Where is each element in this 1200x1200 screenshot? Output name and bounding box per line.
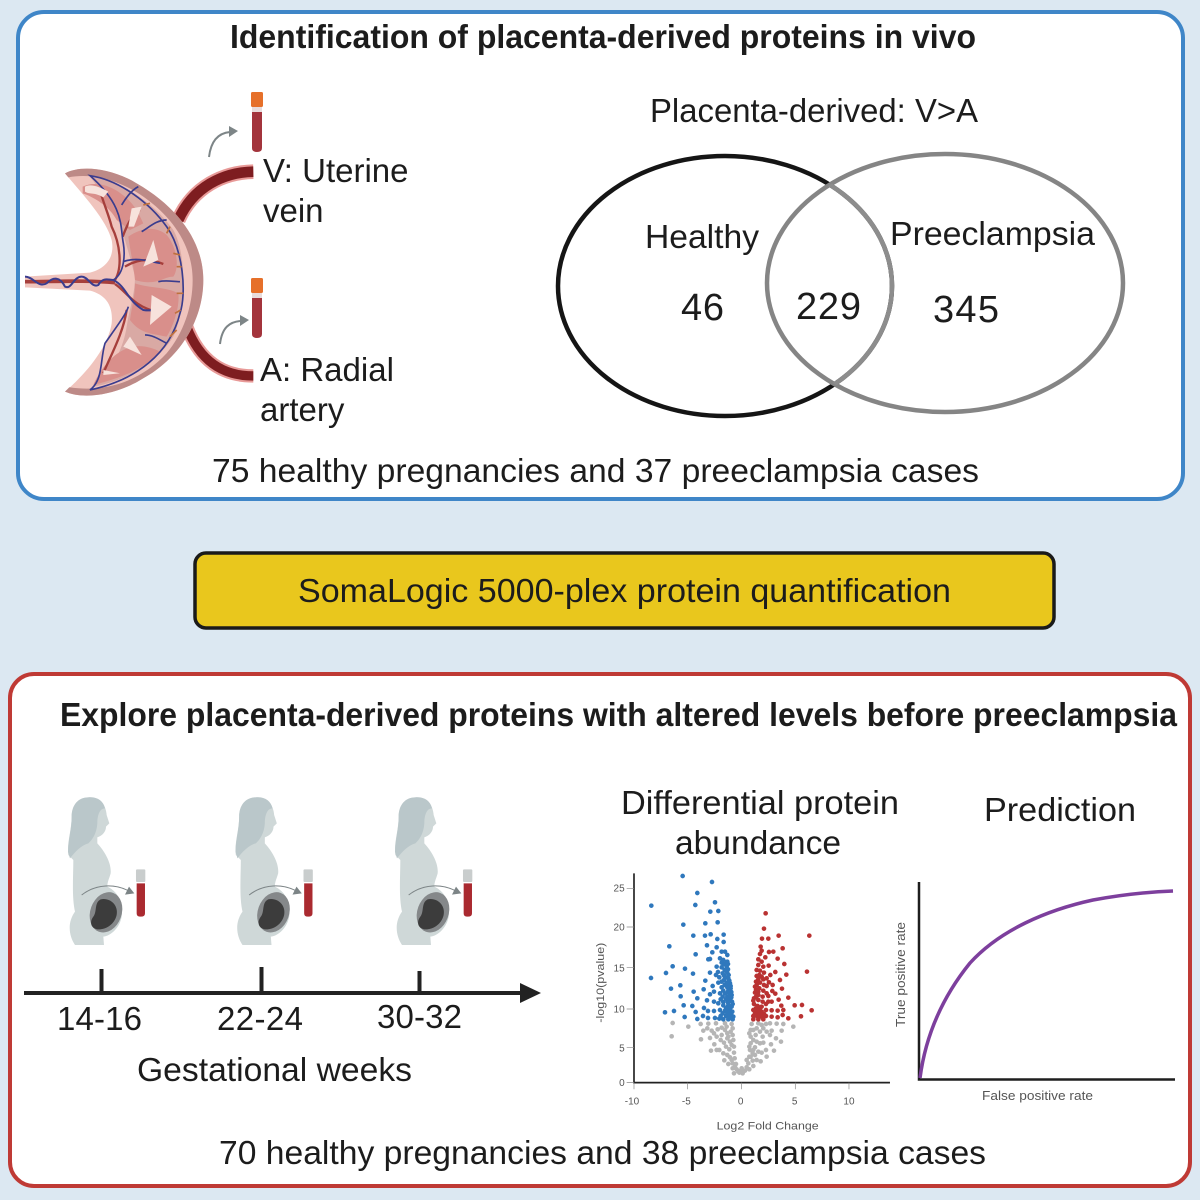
banner: SomaLogic: SomaLogic 5000-plex protein quantification (298, 572, 951, 609)
banner: SomaLogic (195, 553, 1054, 628)
axis tick labels: 5 (619, 1043, 625, 1054)
illustration: placenta with vessels (25, 169, 253, 396)
panel: in vivo identification (18, 12, 1183, 499)
label: Preeclampsia: Preeclampsia (890, 215, 1096, 252)
chart: volcano plot: -5 (682, 1096, 691, 1107)
axis title: log2 fold change: Log2 Fold Change (717, 1120, 819, 1132)
icon: blood tube, radial artery (251, 278, 263, 338)
chart: volcano plot: 10 (843, 1096, 855, 1107)
chart: volcano plot: 0 (738, 1096, 744, 1107)
axis tick labels: 25 (614, 884, 625, 895)
icon: pregnant woman 14-16 (68, 797, 145, 945)
label: A radial artery: artery (260, 391, 345, 428)
label: 30-32: 30-32 (377, 998, 462, 1035)
number: preeclampsia only: 345 (933, 289, 999, 331)
text: cohort bottom: 70 healthy pregnancies and 38 preeclampsia cases (219, 1134, 986, 1171)
label: 14-16: 14-16 (57, 1000, 142, 1037)
icon: blood tube, uterine vein (251, 92, 263, 152)
axis tick labels: 20 (614, 922, 625, 933)
label: V uterine vein: vein (263, 192, 324, 229)
label: V uterine vein: V: Uterine (263, 152, 409, 189)
axis tick labels: 0 (619, 1078, 625, 1089)
chart: Venn diagram (558, 154, 1123, 416)
axis title: -log10 pvalue: -log10(pvalue) (595, 942, 607, 1023)
chart: volcano plot: 5 (792, 1096, 798, 1107)
chart: volcano plot: -10 (625, 1096, 640, 1107)
number: shared: 229 (796, 286, 861, 328)
panel: longitudinal exploration (10, 674, 1190, 1186)
icon: pregnant woman 30-32 (395, 797, 472, 945)
label: A radial artery: A: Radial (260, 351, 394, 388)
label: 22-24: 22-24 (217, 1000, 303, 1037)
label: Healthy: Healthy (645, 218, 760, 255)
label: gestational weeks: Gestational weeks (137, 1051, 412, 1088)
number: healthy only: 46 (681, 287, 724, 329)
axis tick labels: 10 (614, 1004, 625, 1015)
axis tick labels: 15 (614, 963, 625, 974)
heading: identification: Identification of placenta-derived proteins in vivo (230, 18, 976, 55)
icon: pregnant woman 22-24 (235, 797, 313, 945)
chart: volcano plot (595, 873, 890, 1132)
axis title: true positive rate: True positive rate (893, 922, 908, 1027)
timeline arrow (24, 967, 541, 1003)
heading: differential abundance: abundance (675, 824, 841, 861)
heading: explore: Explore placenta-derived proteins with altered levels before preeclampsia (60, 696, 1178, 733)
heading: prediction: Prediction (984, 791, 1136, 828)
arrow: to vein tube (209, 126, 238, 157)
axis tick labels (614, 884, 625, 1089)
heading: Venn title: Placenta-derived: V>A (650, 92, 978, 129)
chart: ROC curve (893, 882, 1175, 1103)
axis title: false positive rate: False positive rate (982, 1088, 1093, 1103)
heading: differential abundance: Differential protein (621, 784, 899, 821)
text: cohort top: 75 healthy pregnancies and 37 preeclampsia cases (212, 452, 979, 489)
arrow: to artery tube (220, 315, 249, 344)
